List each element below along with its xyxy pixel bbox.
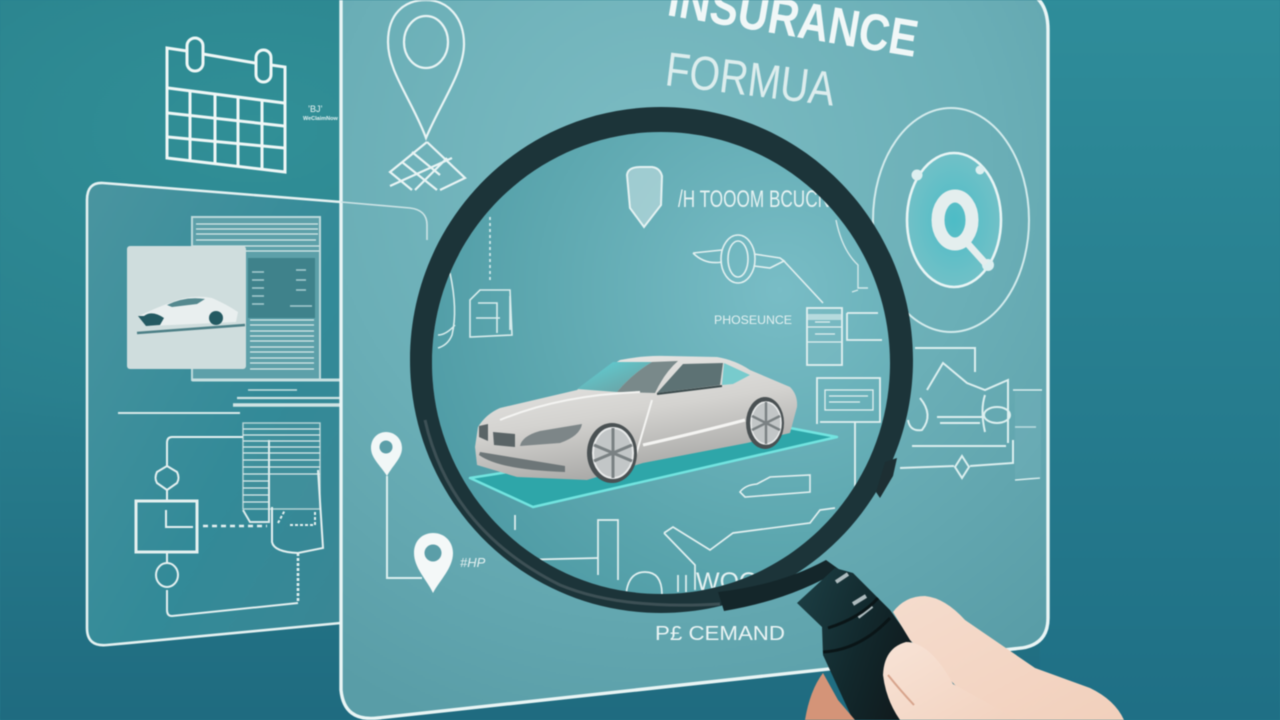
small box [847, 313, 882, 340]
icon: location pin outline with map [388, 0, 465, 190]
small label: PHOSEUNCE [714, 315, 792, 327]
icon: gear diagram [693, 235, 823, 303]
hand [805, 596, 1124, 720]
collar [718, 560, 840, 611]
rim highlight [425, 420, 720, 605]
left card continuation over main panel [341, 202, 427, 240]
rear wheel [746, 397, 784, 449]
bottom caption: P£ CEMAND [655, 623, 785, 645]
text rule lines [118, 380, 340, 413]
small calendar caption: ’BJ’ [308, 104, 323, 114]
icon: calendar [167, 38, 285, 172]
title: insurance [596, 0, 922, 69]
lens glass [432, 132, 890, 594]
panel: main glass panel [341, 0, 1048, 718]
arc [438, 273, 455, 348]
car photo [127, 246, 246, 369]
icon: small location pin with connector [371, 432, 422, 578]
frame with text [817, 378, 880, 495]
magnified content [438, 167, 882, 596]
panel: left document card [87, 183, 341, 645]
icon: box [470, 290, 512, 337]
icon: tag [627, 167, 662, 227]
icon: white location pin [414, 533, 453, 593]
lens text: WOO [696, 568, 758, 596]
vehicle silhouette [740, 475, 810, 497]
document sheet [192, 217, 320, 380]
car [475, 356, 797, 483]
form card [807, 308, 842, 365]
platform [470, 428, 837, 507]
workflow lines [515, 508, 835, 595]
grille and headlights [479, 424, 515, 447]
lined document lower [243, 423, 320, 522]
small pin label: #HP [460, 555, 486, 570]
dashed connector [489, 217, 491, 283]
subtitle: formula: FORMUA [663, 43, 838, 117]
magnifier handle [797, 568, 925, 720]
flow diagram [136, 437, 323, 616]
small calendar caption [303, 104, 338, 122]
diagram: car sketch right [900, 348, 1042, 480]
faint side box [1015, 392, 1041, 478]
front wheel [587, 423, 637, 483]
magnifying glass rim [410, 107, 913, 613]
right arc lines [836, 220, 868, 292]
small calendar caption: WeClaimNow [303, 116, 338, 122]
heading inside lens: /H TOOOM BCUCN [678, 186, 830, 213]
icon: search target circle [873, 108, 1029, 332]
rim bump [876, 458, 897, 498]
